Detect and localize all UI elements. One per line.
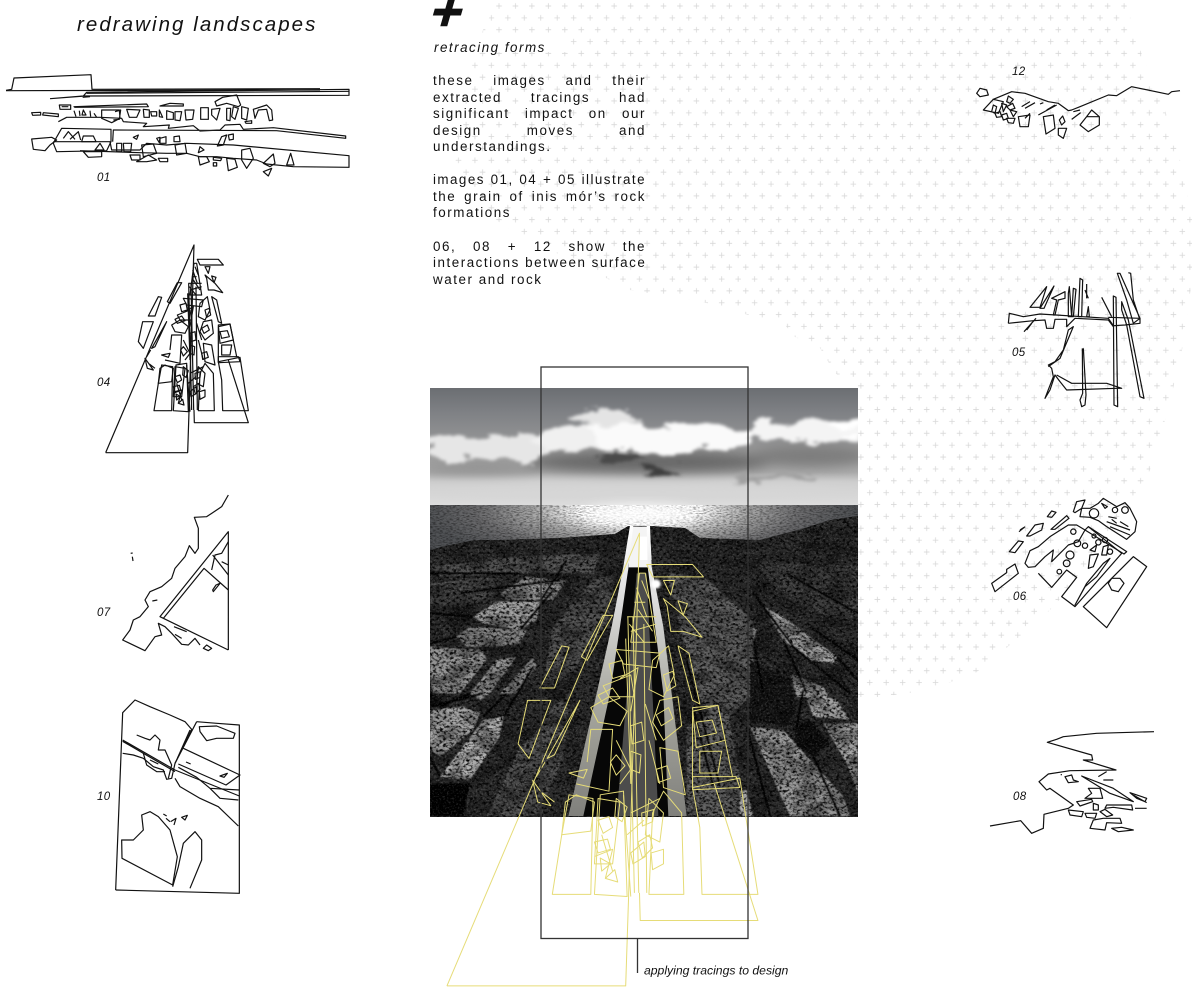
tracing 12: 12 <box>1012 66 1026 78</box>
background: field of grey plus marks <box>456 3 1192 697</box>
tracing 10: 10 <box>97 791 111 803</box>
walkway <box>568 526 687 816</box>
tracing 04: 04 <box>97 377 111 389</box>
text block: explanation: 06, 08 + 12 show the <box>433 238 646 254</box>
caption: applying tracings to design: applying tracings to design <box>644 964 789 978</box>
text block: explanation: design moves and <box>433 122 646 138</box>
leader line <box>636 938 638 973</box>
text block: explanation: images 01, 04 + 05 illustrate <box>433 172 646 187</box>
subheading: retracing forms: retracing forms <box>434 40 546 55</box>
tracing 06: 06 <box>1013 591 1027 603</box>
text block: explanation <box>433 73 646 286</box>
tracing 08: 08 <box>1013 791 1027 803</box>
bright water <box>628 526 648 568</box>
right strip <box>647 526 687 816</box>
text block: explanation: formations <box>433 205 511 220</box>
tracing 10 <box>97 700 240 893</box>
tracing applied to design: yellow overlay <box>447 533 758 986</box>
tracing 01 <box>6 75 349 184</box>
text block: explanation: these images and their <box>433 73 646 88</box>
design frame: black outline <box>541 367 748 938</box>
tracing 05: 05 <box>1012 347 1026 359</box>
tracing 08 <box>990 732 1154 833</box>
tracing 01: 01 <box>97 172 111 184</box>
text block: explanation: the grain of inis mór’s rock <box>433 188 646 204</box>
text block: explanation: extracted tracings had <box>433 90 646 104</box>
tracing 04 <box>97 245 248 453</box>
tracing 05 <box>1008 273 1144 407</box>
sky <box>430 388 858 505</box>
tracing 06 <box>992 498 1147 628</box>
tracing 12 <box>977 66 1180 138</box>
rock texture <box>430 510 858 820</box>
clouds <box>430 405 858 486</box>
tracing 07 <box>97 495 228 651</box>
text block: explanation: interactions between surface <box>433 255 646 270</box>
rock base <box>430 510 858 820</box>
text block: explanation: understandings. <box>433 139 552 154</box>
left strip <box>568 526 633 816</box>
sea <box>430 505 858 555</box>
rock slabs <box>430 553 858 816</box>
title: redrawing landscapes <box>77 13 317 36</box>
photo: coastal rock walkway <box>410 388 870 820</box>
channel <box>584 567 668 816</box>
tracing 07: 07 <box>97 607 111 619</box>
text block: explanation: significant impact on our <box>433 106 646 121</box>
text block: explanation: water and rock <box>433 272 543 286</box>
